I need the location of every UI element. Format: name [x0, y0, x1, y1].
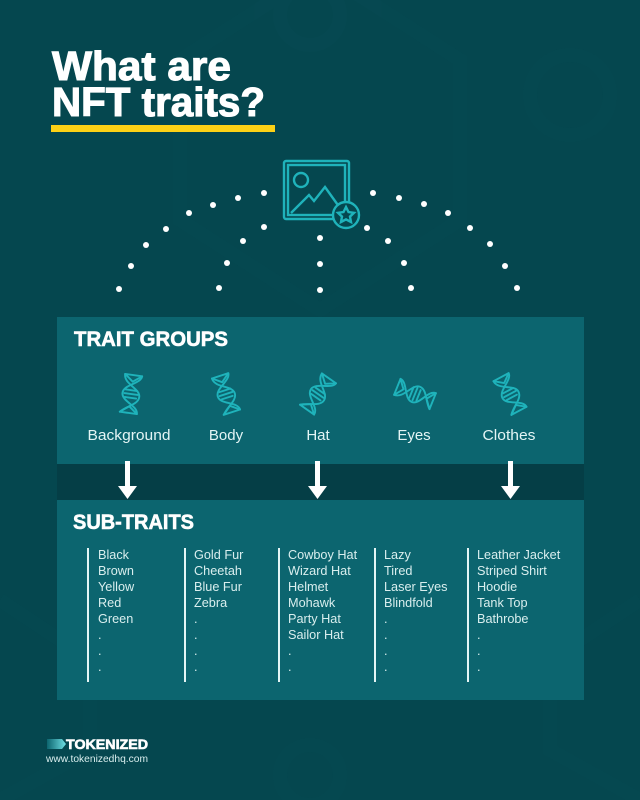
title underline	[51, 125, 275, 132]
heading: sub-traits: SUB-TRAITS	[73, 511, 194, 534]
group labels	[88, 427, 536, 444]
list: eyes traits: .	[384, 644, 388, 658]
list: body traits: Cheetah	[194, 564, 242, 578]
list: clothes traits: Striped Shirt	[477, 564, 547, 578]
list: body traits: .	[194, 612, 198, 626]
list: background traits	[98, 548, 135, 674]
heading: trait groups: TRAIT GROUPS	[74, 328, 228, 351]
band between panels	[57, 464, 584, 500]
list: background traits: Green	[98, 612, 133, 626]
list: hat traits: Wizard Hat	[288, 564, 351, 578]
column dividers	[87, 548, 469, 682]
arrow: hat to sub-traits	[308, 461, 327, 499]
arrow: background to sub-traits	[118, 461, 137, 499]
list: clothes traits: Leather Jacket	[477, 548, 561, 562]
list: background traits: .	[98, 660, 102, 674]
list: eyes traits: .	[384, 660, 388, 674]
list: clothes traits: .	[477, 644, 481, 658]
list: eyes traits	[384, 548, 447, 674]
arrow: clothes to sub-traits	[501, 461, 520, 499]
list: hat traits: .	[288, 660, 292, 674]
list: hat traits: Helmet	[288, 580, 329, 594]
list: hat traits: Sailor Hat	[288, 628, 344, 642]
logo: TOKENIZED	[66, 737, 148, 752]
panel: trait groups	[57, 317, 584, 464]
group labels: Clothes	[482, 427, 536, 444]
logo	[45, 737, 148, 765]
list: eyes traits: Tired	[384, 564, 412, 578]
list: body traits: Blue Fur	[194, 580, 243, 594]
list: background traits: Black	[98, 548, 130, 562]
list: eyes traits: Blindfold	[384, 596, 433, 610]
list: hat traits: Party Hat	[288, 612, 341, 626]
list: clothes traits: Tank Top	[477, 596, 528, 610]
list: hat traits	[288, 548, 358, 674]
list: body traits	[194, 548, 244, 674]
icon: dna clothes	[493, 373, 527, 415]
list: clothes traits: Bathrobe	[477, 612, 528, 626]
list: body traits: Zebra	[194, 596, 228, 610]
icon: dna background	[120, 374, 142, 414]
list: body traits: .	[194, 644, 198, 658]
list: hat traits: Cowboy Hat	[288, 548, 358, 562]
list: background traits: Yellow	[98, 580, 135, 594]
title	[52, 43, 265, 125]
panel: sub-traits	[57, 500, 584, 700]
list: background traits: .	[98, 644, 102, 658]
list: background traits: .	[98, 628, 102, 642]
group labels: Hat	[306, 427, 331, 444]
list: hat traits: Mohawk	[288, 596, 336, 610]
list: eyes traits: .	[384, 612, 388, 626]
icon: dna hat	[300, 373, 336, 415]
list: body traits: Gold Fur	[194, 548, 244, 562]
title: NFT traits?	[52, 79, 265, 125]
group labels: Background	[88, 427, 170, 444]
list: eyes traits: Lazy	[384, 548, 411, 562]
list: background traits: Brown	[98, 564, 134, 578]
dotted connector lines	[116, 190, 520, 293]
list: background traits: Red	[98, 596, 121, 610]
list: hat traits: .	[288, 644, 292, 658]
logo: www.tokenizedhq.com	[45, 754, 148, 765]
list: eyes traits: .	[384, 628, 388, 642]
group labels: Body	[209, 427, 244, 444]
icon: dna eyes	[394, 379, 436, 409]
icon: NFT image with star	[284, 161, 359, 228]
list: clothes traits	[477, 548, 561, 674]
list: eyes traits: Laser Eyes	[384, 580, 447, 594]
title: What are	[52, 43, 231, 89]
icon: dna body	[212, 373, 240, 415]
list: clothes traits: Hoodie	[477, 580, 517, 594]
list: clothes traits: .	[477, 660, 481, 674]
list: body traits: .	[194, 660, 198, 674]
group labels: Eyes	[397, 427, 431, 444]
list: body traits: .	[194, 628, 198, 642]
list: clothes traits: .	[477, 628, 481, 642]
